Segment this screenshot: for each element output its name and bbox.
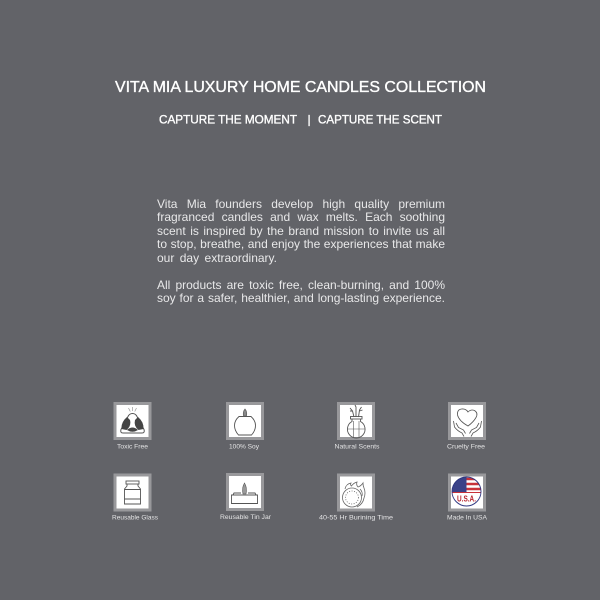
icon: 100% soy [228,404,262,438]
label: toxic free: Toxic Free [117,444,148,450]
icon: made in USA: U.S.A. [457,494,476,504]
label: 100% soy: 100% Soy [229,444,260,450]
text block: brand description [157,196,445,264]
icon: reusable tin jar [228,474,262,510]
icon: toxic free [115,404,150,438]
text block: brand description: fragranced candles and wax melts. Each soothing [157,210,445,224]
subtitle: CAPTURE THE MOMENT [159,112,298,126]
text block: brand description: to stop, breathe, and enjoy the experiences that make [157,237,445,251]
icon: burning time [338,475,374,510]
text block: brand description: Vita Mia founders develop high quality premium [157,196,445,210]
subtitle [159,112,443,126]
icon: made in USA [450,475,484,510]
subtitle: | [308,112,311,126]
text block: product promise: All products are toxic free, clean-burning, and 100% [157,278,445,292]
subtitle: CAPTURE THE SCENT [318,112,443,126]
label: reusable tin jar: Reusable Tin Jar [220,514,272,521]
icon: natural scents [338,404,374,438]
text block: brand description: our day extraordinary. [157,250,277,264]
label: burning time: 40-55 Hr Burining Time [319,514,393,522]
icon: cruelty free [450,404,484,438]
text block: product promise [157,278,445,305]
icon: reusable glass [115,475,150,510]
label: cruelty free: Cruelty Free [447,444,485,450]
label: natural scents: Natural Scents [334,444,380,450]
title: VITA MIA LUXURY HOME CANDLES COLLECTION [115,79,486,96]
label: reusable glass: Reusable Glass [112,514,159,522]
text block: product promise: soy for a safer, healthier, and long-lasting experience. [157,291,445,305]
label: made in USA: Made In USA [447,514,488,522]
text block: brand description: scent is inspired by the brand mission to invite us all [157,224,445,238]
